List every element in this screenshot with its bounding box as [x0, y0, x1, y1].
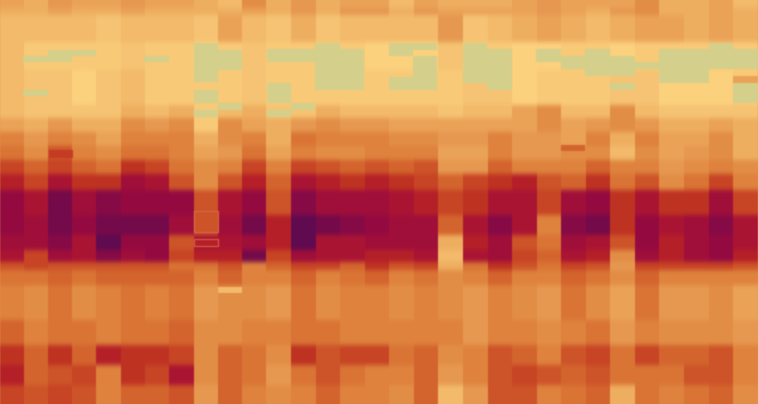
pale green low-value patches — [23, 43, 758, 117]
outlined cells — [194, 212, 218, 246]
narrow darker and lighter cell bands — [49, 76, 758, 293]
